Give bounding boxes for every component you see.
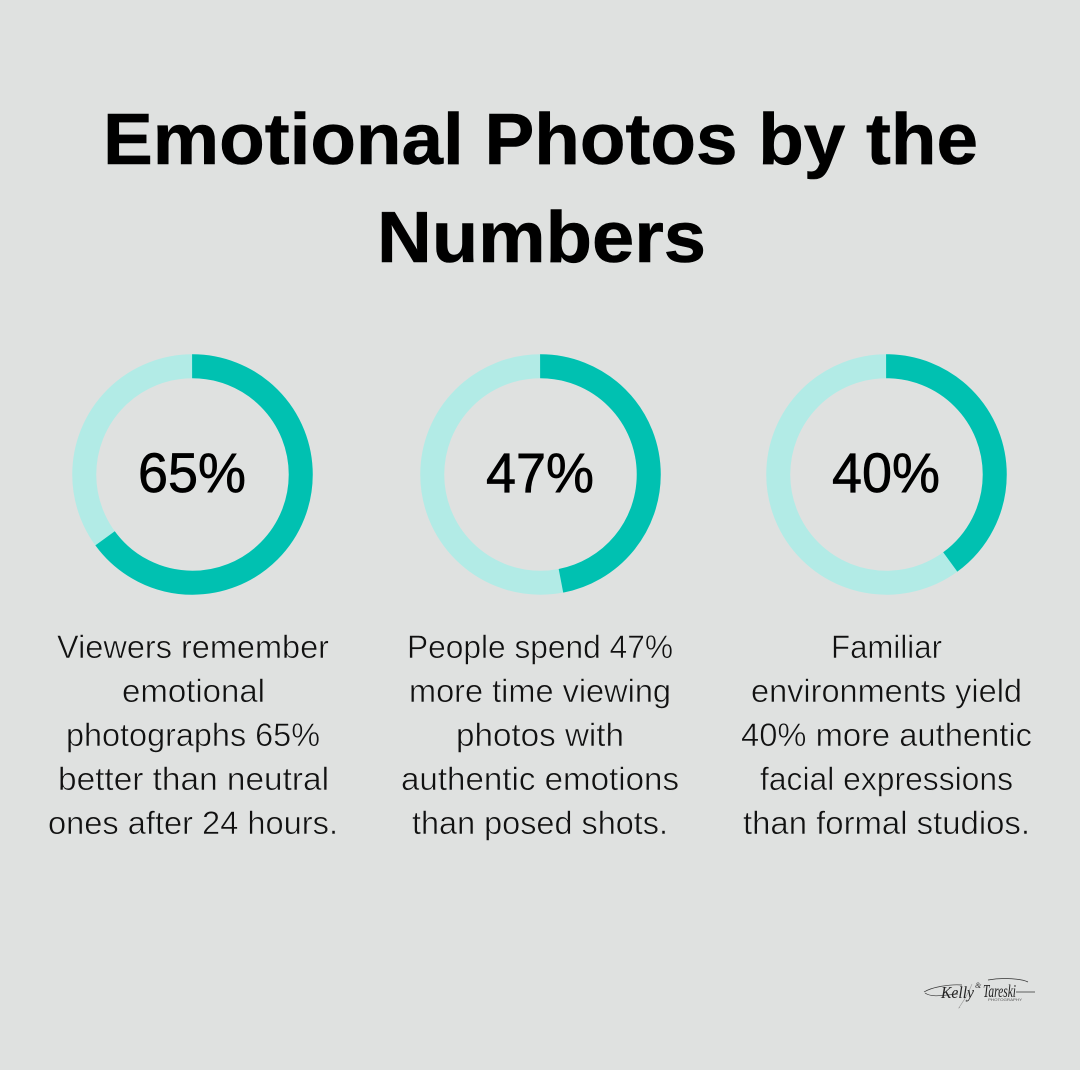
text: 47% description: authentic emotions [401,761,679,797]
panel: 40% stat [741,366,1032,841]
text: 65% description: ones after 24 hours. [48,805,338,841]
title [103,100,978,278]
panel: 65% stat [48,366,338,841]
text: 65% description: photographs 65% [66,717,320,753]
text: 65% description: Viewers remember [57,629,329,665]
text: 40% description: 40% more authentic [741,717,1032,753]
text: 40% description: than formal studios. [743,805,1030,841]
text: 40% description: facial expressions [760,761,1013,797]
text: 40% description [741,629,1032,841]
donut chart: 65%: 65% [138,441,246,504]
panel: 47% stat [401,366,679,841]
donut chart: 47% [432,366,649,583]
logo: Kelly & Tareski Photography signature: Kelly [940,983,974,1002]
text: 47% description: photos with [456,717,624,753]
logo: Kelly & Tareski Photography signature: & [975,981,982,990]
logo: Kelly & Tareski Photography signature: Tareski [983,981,1016,1001]
logo: Kelly & Tareski Photography signature: PHOTOGRAPHY [988,997,1022,1002]
donut chart: 65% [84,366,301,583]
donut chart: 40% [778,366,995,583]
text: 47% description: than posed shots. [412,805,668,841]
donut chart: 40%: 40% [832,441,940,504]
text: 47% description [401,629,679,841]
logo: Kelly & Tareski Photography signature [924,979,1035,1008]
text: 40% description: environments yield [751,673,1022,709]
text: 47% description: People spend 47% [407,629,673,665]
text: 65% description [48,629,338,841]
text: 40% description: Familiar [831,629,942,665]
text: 65% description: better than neutral [58,761,329,797]
text: 65% description: emotional [122,673,265,709]
title: Numbers [377,198,706,278]
text: 47% description: more time viewing [409,673,671,709]
title: Emotional Photos by the [103,100,978,180]
donut chart: 47%: 47% [486,441,594,504]
